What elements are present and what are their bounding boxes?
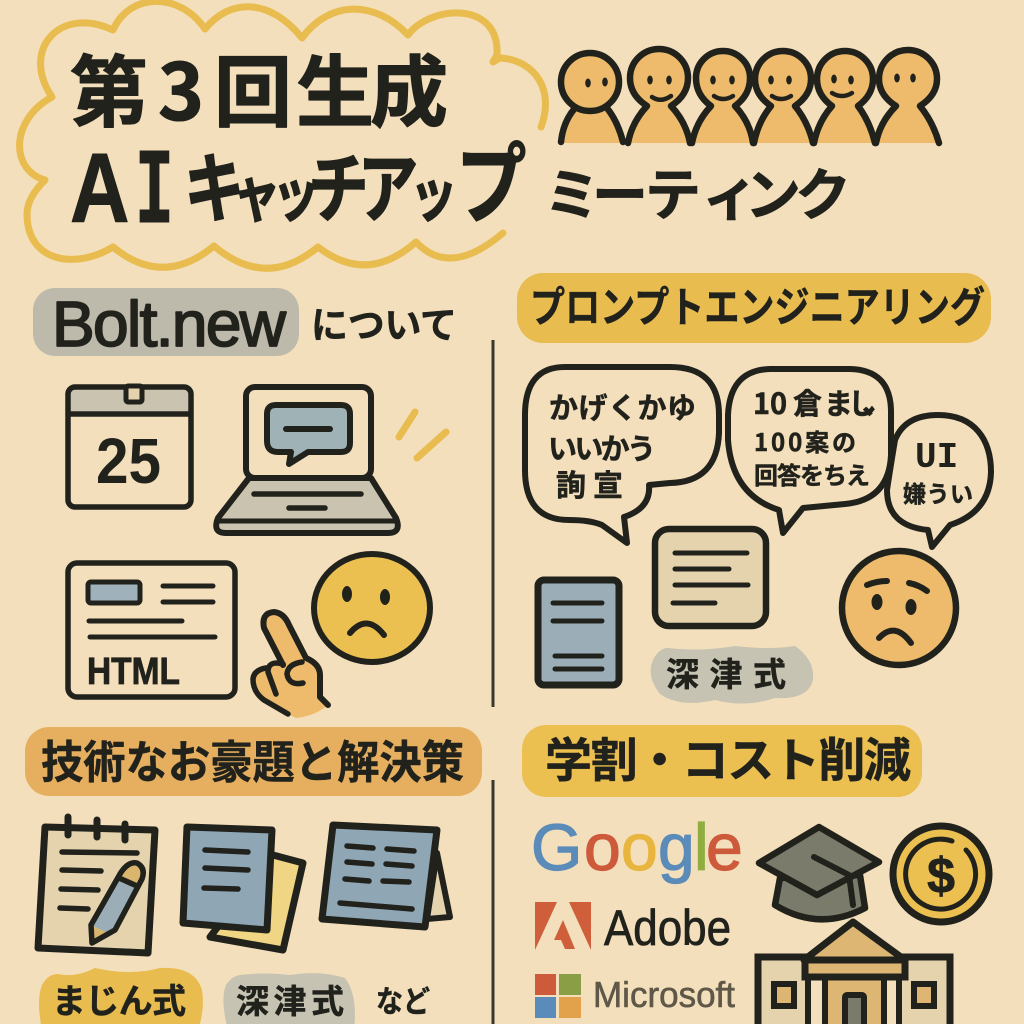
title: ャ [233, 146, 281, 234]
logo: Microsoft [535, 974, 735, 1018]
title: ミーティンク [544, 151, 851, 232]
icon: laptop with chat bubble [216, 387, 398, 533]
icon: pointing hand [252, 612, 328, 718]
logo: Google: e [706, 810, 743, 884]
pencil [91, 863, 143, 943]
icon: dollar coin [893, 826, 989, 922]
icon: beige document [655, 529, 766, 626]
icon: HTML window [68, 563, 235, 697]
heading: Bolt.new: について [311, 295, 457, 349]
icon: university building [758, 922, 950, 1024]
heading: student discount and cost cuts: 学割・コスト削減 [545, 722, 911, 791]
person 3 [692, 51, 753, 143]
icon: graduation cap [759, 827, 879, 919]
icon: yellow sad face [314, 554, 430, 662]
title: I [135, 132, 174, 255]
icon: sparks [399, 412, 446, 458]
label: など: など [376, 977, 430, 1021]
logo: Adobe [535, 900, 731, 956]
title cloud outline [20, 1, 546, 268]
vertical divider [492, 340, 494, 1024]
logo: Adobe: Adobe [604, 900, 731, 956]
icon: calendar: 25 [96, 425, 161, 497]
heading: Bolt.new: Bolt.new [52, 288, 287, 360]
heading: Bolt.new [33, 288, 457, 360]
heading: technical issues: 技術なお豪題と解決策 [41, 726, 464, 791]
speech bubble 1: かげくかゆ [549, 385, 696, 427]
icon: notebook with pencil [38, 817, 155, 953]
title: A [70, 134, 129, 244]
title: キ [184, 128, 245, 238]
person 5 [814, 51, 875, 143]
speech bubble 3 [887, 415, 991, 547]
icon: blue document over yellow note [183, 827, 303, 950]
person 6 [876, 50, 939, 143]
speech bubble 3: 嫌うい [903, 475, 973, 509]
logo: Google: o [584, 810, 621, 884]
speech bubble 2 [728, 369, 891, 533]
icon: standing table card [322, 825, 450, 927]
icon: orange worried face [842, 551, 956, 665]
person 1 [560, 53, 624, 143]
label: 深津式 [651, 646, 813, 704]
person 4 [754, 51, 813, 143]
speech bubble 2: 回答をちえ [754, 456, 870, 491]
title: ッ [272, 146, 320, 234]
speech bubble 3: UI [915, 437, 958, 478]
title: 第3回生成 [70, 31, 448, 143]
icon: dollar coin: $ [927, 848, 955, 904]
title: ア [358, 128, 418, 238]
label: 深津式 bottom: 深津式 [236, 975, 344, 1023]
logo: Google: l [694, 810, 709, 884]
icon: blue document [538, 580, 619, 685]
logo: Google: g [658, 810, 695, 884]
icon: HTML window: HTML [87, 651, 180, 693]
title: プ [456, 114, 526, 241]
logo: Microsoft: Microsoft [593, 974, 735, 1015]
logo: Google: G [531, 810, 582, 884]
people row [560, 49, 939, 143]
label: 深津式: 深津式 [666, 648, 786, 696]
logo: Google: o [621, 810, 658, 884]
speech bubble 2: 100案の [754, 423, 856, 458]
title [70, 31, 851, 255]
person 2 [628, 49, 690, 143]
icon: calendar [68, 386, 191, 507]
speech bubble 1 [525, 367, 719, 543]
speech bubble 1: 詢宣 [556, 461, 623, 505]
title: チ [308, 128, 369, 238]
label: まじん式: まじん式 [52, 974, 186, 1023]
speech bubble 1: いいかう [548, 426, 656, 468]
speech bubble 2: 10倉まし、 [753, 381, 891, 423]
title: ッ [410, 146, 458, 234]
